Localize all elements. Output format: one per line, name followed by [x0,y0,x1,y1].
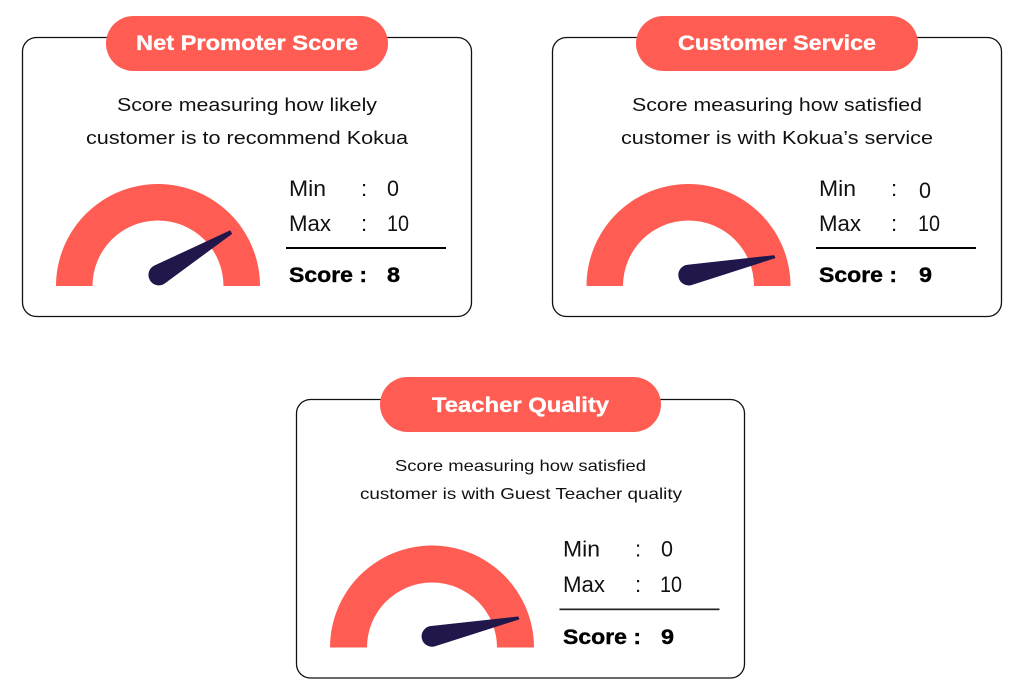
panel: Teacher Quality [296,377,744,678]
description text [86,94,409,148]
stats: min and max: Max [819,211,861,236]
stats: min and max: 0 [661,536,673,562]
score: 9: 9 [919,264,932,287]
score: 9: 9 [661,626,674,649]
description text: Score measuring how satisfied [395,458,646,475]
stats: min and max: 10 [660,572,682,597]
score: 9: Score : [819,264,897,287]
score: 8: Score : [289,264,367,287]
stats: min and max: 10 [918,211,940,236]
stats: min and max: : [891,211,897,236]
stats: min and max: Min [563,536,600,562]
description text: Score measuring how likely [117,94,378,115]
divider [816,247,976,249]
stats: min and max: : [635,572,641,597]
description text: customer is with Guest Teacher quality [360,486,682,503]
stats: min and max [563,536,682,597]
stats: min and max [819,176,940,236]
stats: min and max: 10 [387,211,409,236]
gauge chart: score 8 [56,184,260,286]
stats: min and max [289,176,409,236]
stats: min and max: Max [563,572,605,597]
heading pill: Teacher Quality [380,377,661,432]
divider [286,247,446,249]
card outline [552,38,1002,316]
card outline [22,38,472,316]
gauge chart: score 9 [330,546,534,648]
description text [621,94,933,148]
panel: Net Promoter Score [22,16,472,316]
score: 9 [819,264,932,287]
stats: min and max: 0 [387,176,399,201]
score: 8: 8 [387,264,400,287]
card outline [296,400,744,678]
score: 8 [289,264,400,287]
gauge chart: score 9 [586,184,790,286]
stats: min and max: Min [289,176,326,201]
heading pill: Net Promoter Score [106,16,388,71]
heading pill: Net Promoter Score: Net Promoter Score [136,31,358,55]
stats: min and max: 0 [919,178,931,203]
heading pill: Customer Service: Customer Service [678,31,876,55]
description text: customer is with Kokua’s service [621,127,933,148]
description text: customer is to recommend Kokua [86,127,409,148]
score: 9: Score : [563,626,641,649]
heading pill: Teacher Quality: Teacher Quality [432,393,609,417]
panel: Customer Service [552,16,1002,316]
stats: min and max: : [361,211,367,236]
divider [560,608,720,610]
stats: min and max: Min [819,176,856,201]
stats: min and max: : [635,536,641,562]
description text: Score measuring how satisfied [632,94,922,115]
score: 9 [563,626,674,649]
stats: min and max: : [361,176,367,201]
stats: min and max: Max [289,211,331,236]
description text [360,458,682,503]
heading pill: Customer Service [636,16,918,71]
stats: min and max: : [891,176,897,201]
